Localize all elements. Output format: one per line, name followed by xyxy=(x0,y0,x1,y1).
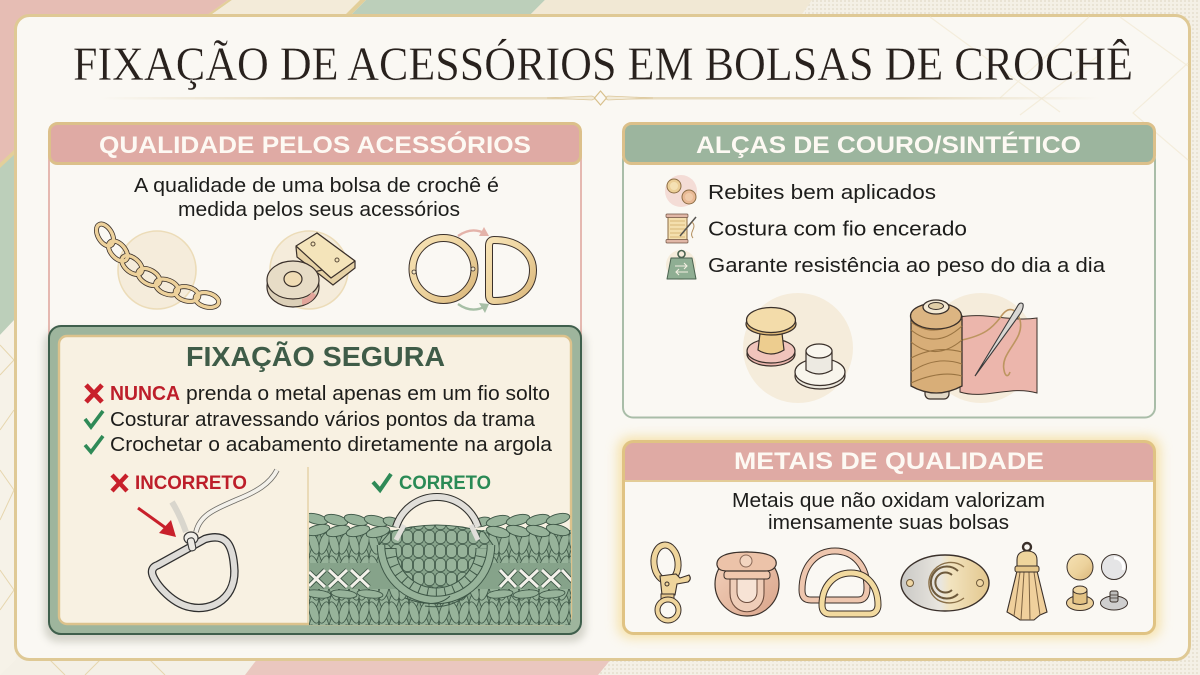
list item: rebites xyxy=(665,175,936,207)
header: qualidade xyxy=(50,124,580,164)
text: metais: Metais que não oxidam valorizam xyxy=(732,489,1045,512)
rule list xyxy=(85,383,553,456)
list item: garante: Garante resistência ao peso do dia a dia xyxy=(708,255,1106,277)
icon: rivets xyxy=(665,175,697,207)
rule: nunca: prenda o metal apenas em um fio solto xyxy=(186,383,550,405)
icon: spool and needle xyxy=(666,214,696,243)
arrow: red pointer xyxy=(138,508,176,537)
panel: fixação segura xyxy=(44,326,586,642)
rule: nunca: NUNCA xyxy=(110,383,180,405)
icon: chain xyxy=(93,221,220,310)
rule: crochetar: Crochetar o acabamento diretamente na argola xyxy=(110,434,553,456)
rule: costurar: Costurar atravessando vários pontos da trama xyxy=(110,409,536,431)
illustration: correct crochet xyxy=(303,497,573,625)
header: metais: METAIS DE QUALIDADE xyxy=(734,448,1044,475)
header: alças: ALÇAS DE COURO/SINTÉTICO xyxy=(696,131,1081,159)
icon: studs xyxy=(1066,554,1128,610)
icon: magnetic clasp xyxy=(267,231,355,309)
panel: qualidade pelos acessórios xyxy=(49,124,581,340)
title: FIXAÇÃO DE ACESSÓRIOS EM BOLSAS DE CROCHÊ xyxy=(73,37,1133,91)
list item: garante xyxy=(666,250,1106,280)
text: qualidade: medida pelos seus acessórios xyxy=(178,198,460,221)
text: metais xyxy=(732,489,1045,534)
icon: rings with arrows xyxy=(412,227,533,313)
icon: D rings xyxy=(802,551,878,614)
heading: fixação segura: FIXAÇÃO SEGURA xyxy=(186,341,445,372)
illustration: waxed thread and needle xyxy=(910,293,1037,403)
header: metais xyxy=(624,442,1154,482)
icon: logo plate xyxy=(901,555,989,611)
panel: alças de couro/sintético xyxy=(623,124,1155,418)
panel: metais de qualidade xyxy=(618,437,1160,638)
text: qualidade: A qualidade de uma bolsa de crochê é xyxy=(134,174,499,197)
text: metais: imensamente suas bolsas xyxy=(768,511,1009,534)
illustration: rivets xyxy=(743,293,853,403)
icon: lobster clasp xyxy=(652,544,690,620)
icon: weight xyxy=(666,250,696,280)
list item: costura: Costura com fio encerado xyxy=(708,218,967,240)
label: correto: CORRETO xyxy=(399,472,491,494)
icon: turn lock xyxy=(715,552,779,616)
illustration: incorrect fastening xyxy=(138,470,277,608)
title ornament xyxy=(100,91,1100,105)
icon: tassel xyxy=(1007,543,1047,620)
text: qualidade xyxy=(134,174,499,221)
list item: rebites: Rebites bem aplicados xyxy=(708,182,936,204)
header: qualidade: QUALIDADE PELOS ACESSÓRIOS xyxy=(99,131,531,159)
list item: costura xyxy=(666,214,967,243)
label: incorreto: INCORRETO xyxy=(135,472,247,494)
header: alças xyxy=(624,124,1154,164)
